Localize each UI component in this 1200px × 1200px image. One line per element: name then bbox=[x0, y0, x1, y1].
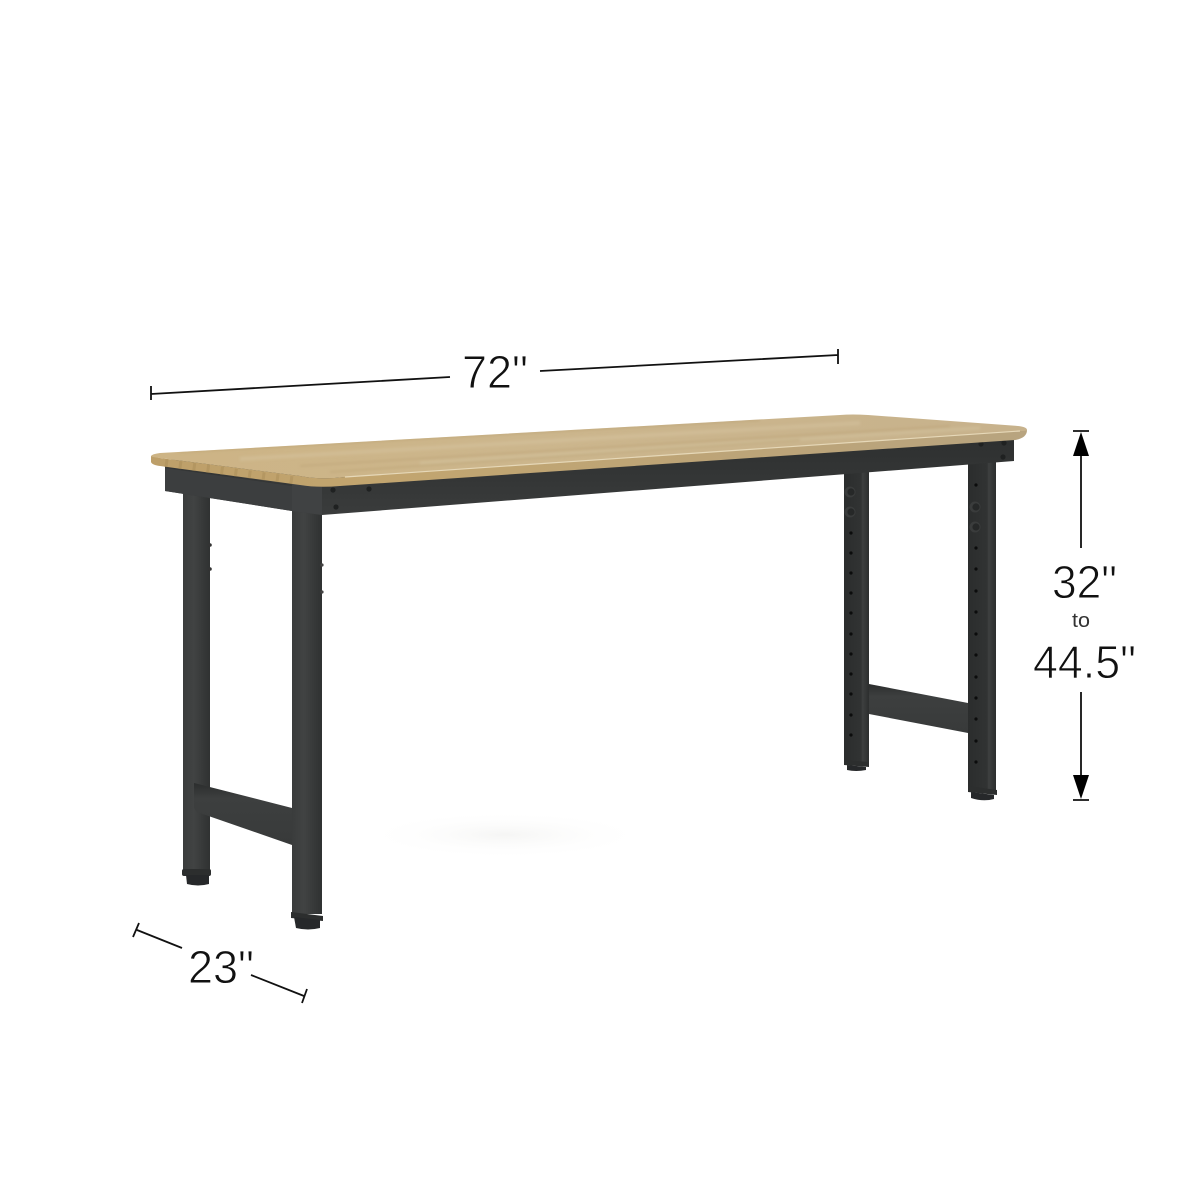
label: 23: 23" bbox=[188, 941, 254, 993]
tabletop bbox=[151, 414, 1027, 487]
label: 44.5: 44.5" bbox=[1033, 636, 1136, 688]
front-left leg bbox=[291, 508, 324, 930]
depth dimension: 23 inches bbox=[133, 923, 307, 1003]
back-right leg bbox=[844, 466, 869, 771]
left crossbar bbox=[194, 783, 292, 845]
label: to: to bbox=[1072, 610, 1090, 632]
tabletop surface bbox=[151, 414, 1027, 478]
front-right leg bbox=[968, 456, 997, 800]
floor shadow bbox=[360, 811, 650, 859]
back-left leg bbox=[182, 490, 212, 886]
width dimension: 72 inches bbox=[151, 346, 838, 400]
height dimension: 32 to 44.5 inches bbox=[1033, 431, 1136, 800]
diagram: workbench with dimensions bbox=[132, 349, 1134, 1004]
arrow up bbox=[1073, 431, 1089, 548]
tabletop front edge bbox=[151, 430, 1027, 487]
right crossbar bbox=[869, 684, 968, 733]
label: 32: 32" bbox=[1052, 556, 1117, 608]
label: 72: 72" bbox=[462, 346, 528, 398]
apron frame bbox=[165, 430, 1014, 515]
arrow down bbox=[1073, 692, 1089, 800]
